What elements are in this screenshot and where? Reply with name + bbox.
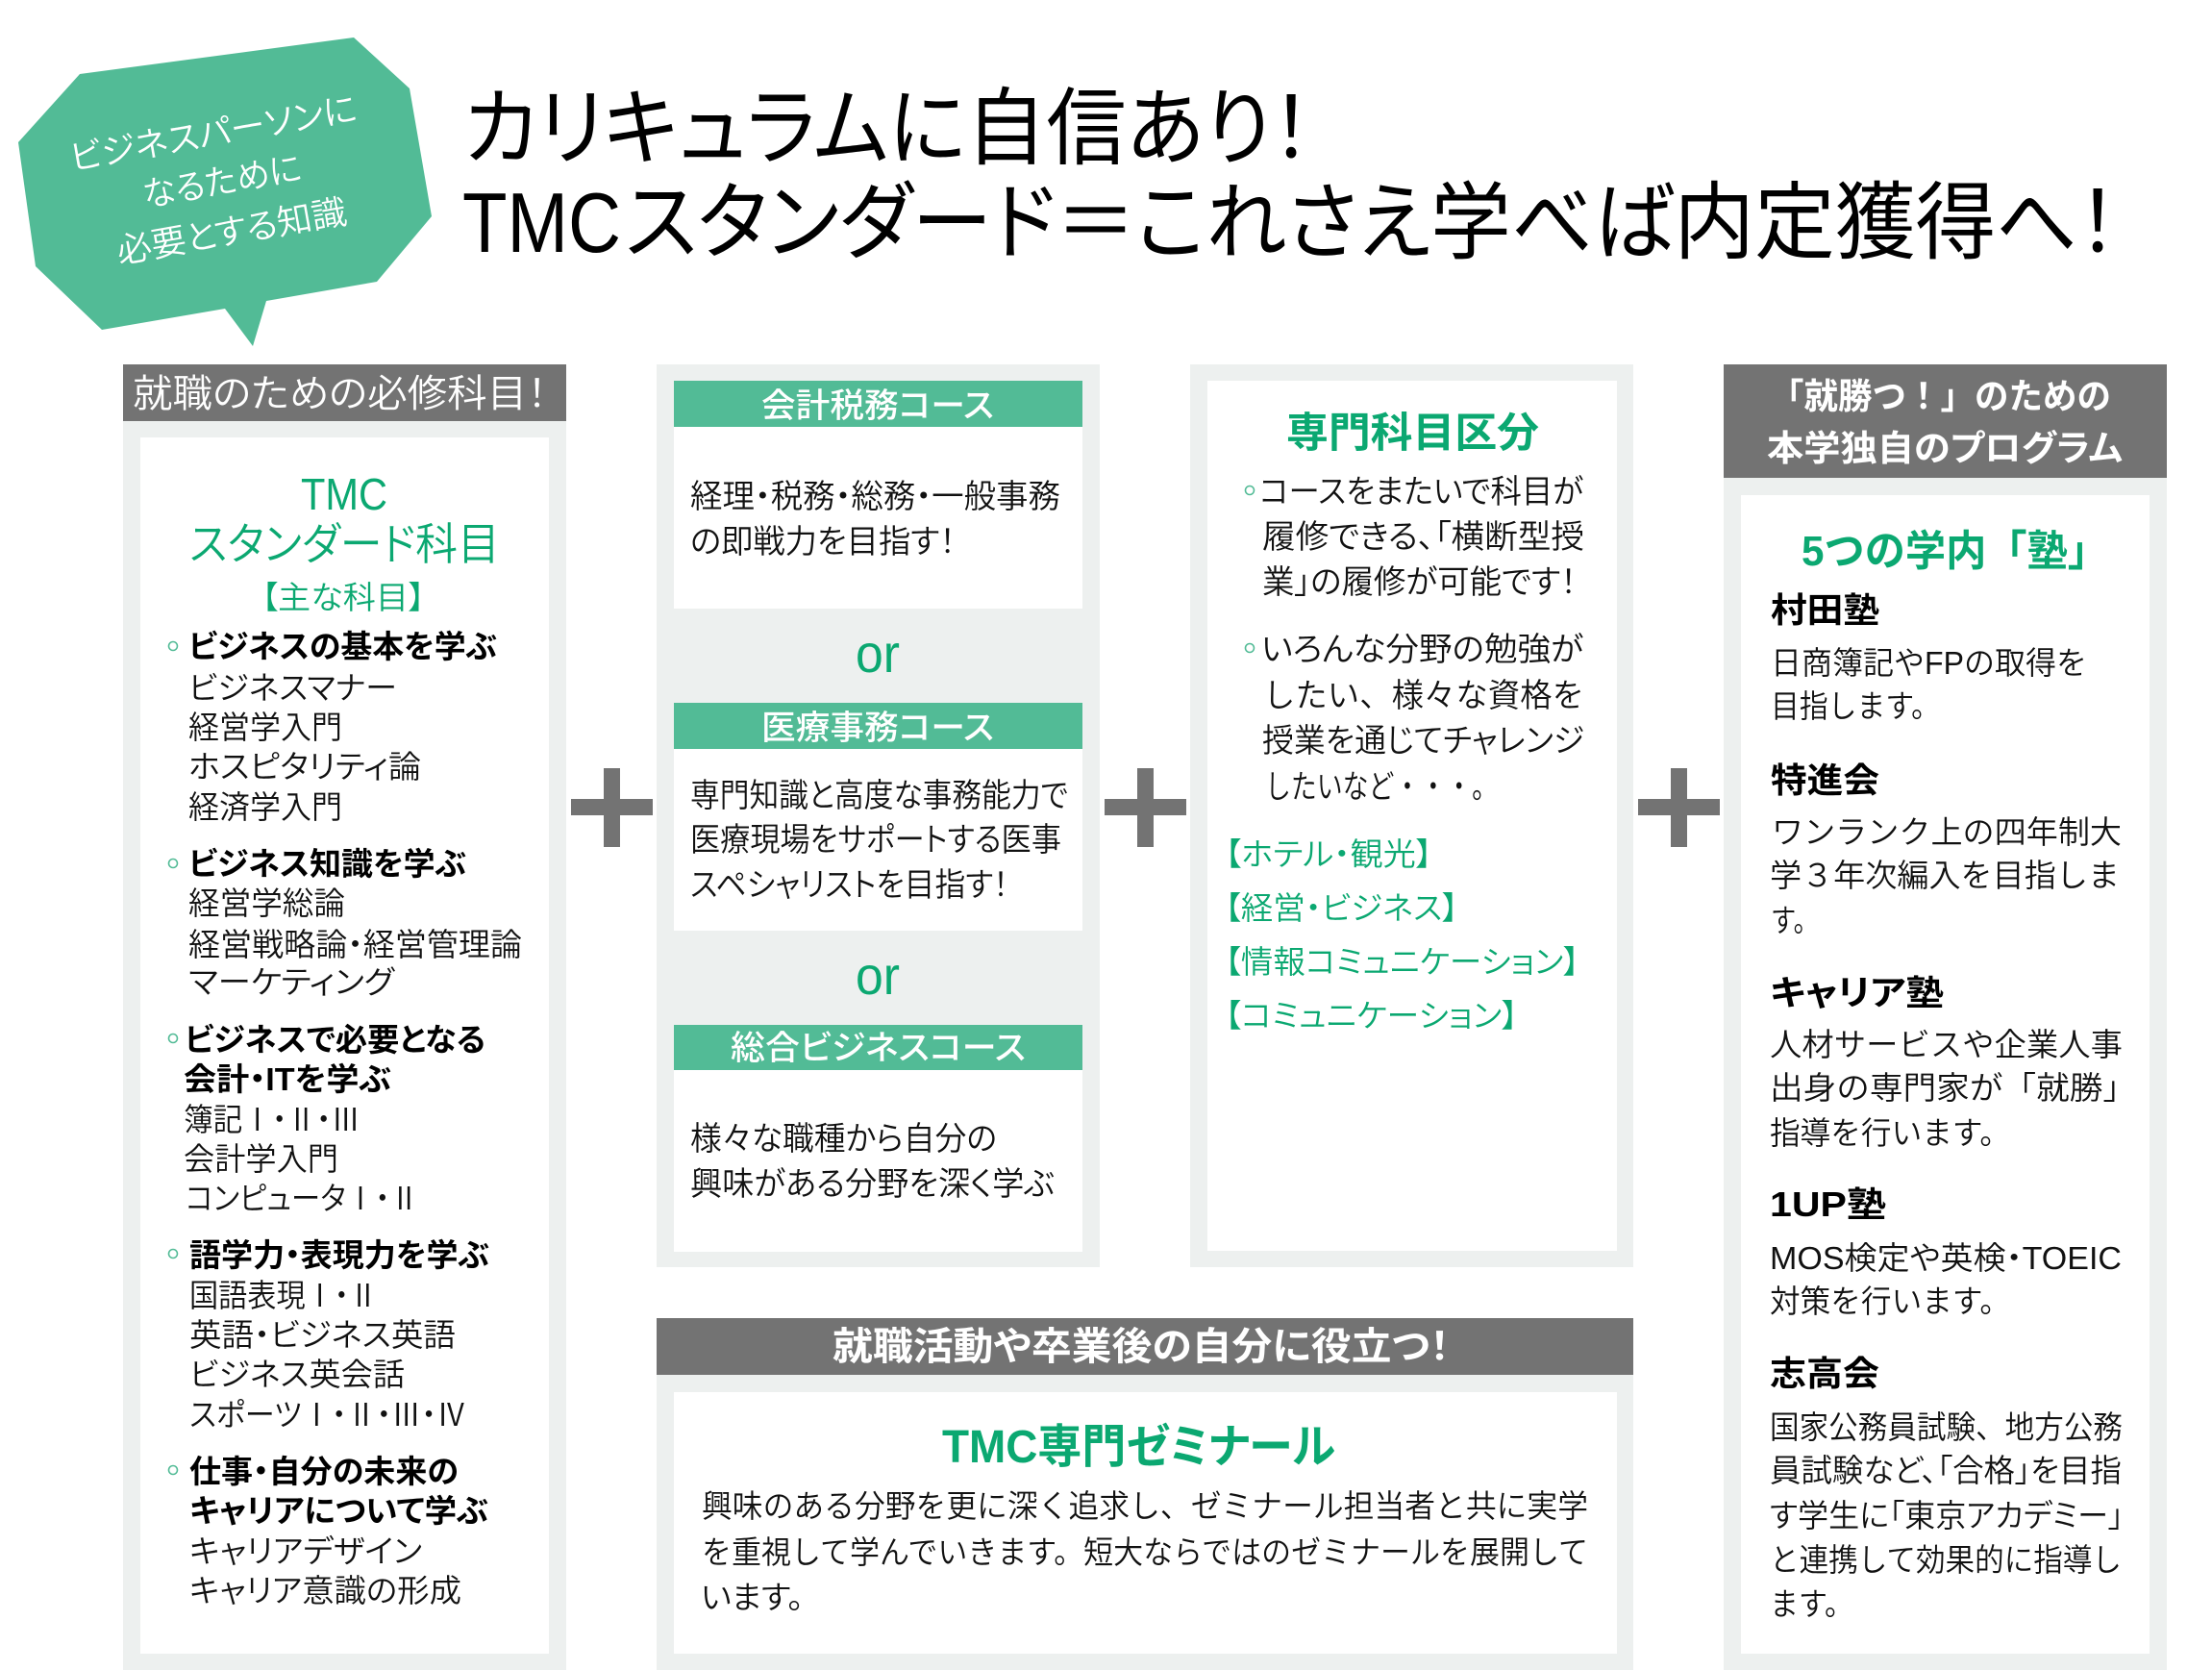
panel: required subjects: コンピュータⅠ・Ⅱ bbox=[186, 1181, 419, 1216]
panel: seminar: 興味のある分野を更に深く追求し、ゼミナール担当者と共に実学 bbox=[702, 1488, 1588, 1524]
course: medical office: 医療事務コース bbox=[761, 710, 994, 747]
panel: original program: キャリア塾 bbox=[1770, 973, 1944, 1012]
panel: specialist subject categories: いろんな分野の勉強が bbox=[1261, 632, 1584, 668]
panel: required subjects: キャリアデザイン bbox=[189, 1533, 422, 1569]
panel: required subjects: 就職のための必修科目！ bbox=[133, 373, 547, 415]
panel: specialist subject categories: したいなど・・・。 bbox=[1265, 769, 1498, 806]
panel: original program: 「就勝つ！」のための bbox=[1770, 377, 2111, 416]
panel: specialist subject categories: 【情報コミュニケーション】 bbox=[1225, 944, 1579, 980]
or label 1: or bbox=[856, 623, 900, 684]
course: general business: 興味がある分野を深く学ぶ bbox=[690, 1166, 1055, 1203]
panel: required subjects: TMC bbox=[301, 469, 387, 519]
panel: original program: 1UP塾 bbox=[1770, 1184, 1886, 1224]
panel: original program: 指導を行います。 bbox=[1770, 1115, 2010, 1151]
panel: specialist subject categories: 【経営・ビジネス】 bbox=[1225, 890, 1458, 926]
panel: original program: 日商簿記やFPの取得を bbox=[1771, 645, 2087, 681]
panel: original program: 人材サービスや企業人事 bbox=[1770, 1027, 2123, 1062]
or label 2: or bbox=[856, 945, 900, 1006]
panel: required subjects bbox=[123, 364, 566, 1670]
panel: required subjects: 語学力・表現力を学ぶ bbox=[189, 1237, 489, 1273]
course: general business bbox=[674, 1025, 1082, 1252]
panel: required subjects: 国語表現Ⅰ・Ⅱ bbox=[189, 1278, 378, 1313]
course: medical office: 医療現場をサポートする医事 bbox=[690, 822, 1061, 859]
title: カリキュラムに自信あり！ bbox=[463, 81, 1311, 176]
panel: original program: 本学独自のプログラム bbox=[1767, 429, 2123, 468]
panel: required subjects: 経営学総論 bbox=[188, 885, 345, 921]
panel: required subjects: 仕事・自分の未来の bbox=[189, 1454, 459, 1489]
panel: specialist subject categories: コースをまたいで科目が bbox=[1259, 474, 1584, 511]
panel: required subjects: 経営学入門 bbox=[188, 710, 342, 745]
panel: seminar: を重視して学んでいきます。短大ならではのゼミナールを展開して bbox=[702, 1534, 1588, 1570]
panel: required subjects: 会計学入門 bbox=[184, 1141, 338, 1177]
panel: required subjects: 英語・ビジネス英語 bbox=[189, 1317, 456, 1353]
panel: original program: 国家公務員試験、地方公務 bbox=[1770, 1409, 2123, 1445]
panel: original program: 目指します。 bbox=[1771, 688, 1940, 724]
panel: seminar: います。 bbox=[701, 1580, 804, 1615]
panel: original program: 特進会 bbox=[1771, 760, 1879, 800]
panel: required subjects: スポーツⅠ・Ⅱ・Ⅲ・Ⅳ bbox=[189, 1397, 466, 1433]
panel: required subjects: ビジネス知識を学ぶ bbox=[188, 846, 466, 882]
panel: specialist subject categories: 【コミュニケーション】 bbox=[1225, 998, 1518, 1034]
panel: original program: 学３年次編入を目指しま bbox=[1770, 858, 2120, 893]
panel: original program: 村田塾 bbox=[1771, 590, 1879, 630]
panel: original program: 対策を行います。 bbox=[1770, 1284, 2010, 1319]
plus icon 2 bbox=[1105, 768, 1186, 847]
panel: original program: す。 bbox=[1771, 903, 1819, 938]
panel: original program: ます。 bbox=[1770, 1586, 1853, 1622]
panel: courses bbox=[657, 364, 1100, 1267]
speech bubble callout: 必要とする知識 bbox=[113, 191, 350, 271]
panel: required subjects: 会計・ITを学ぶ bbox=[184, 1061, 391, 1097]
course: medical office: スペシャリストを目指す！ bbox=[690, 867, 1008, 904]
panel: specialist subject categories: 業」の履修が可能です！ bbox=[1262, 564, 1577, 601]
title: スタンダード＝これさえ学べば内定獲得へ！ bbox=[625, 175, 2118, 270]
panel: seminar bbox=[657, 1318, 1633, 1670]
speech bubble callout: なるために bbox=[139, 148, 305, 214]
panel: specialist subject categories: 【ホテル・観光】 bbox=[1225, 836, 1432, 872]
title bbox=[462, 81, 2118, 270]
course: accounting and tax: 会計税務コース bbox=[761, 387, 994, 425]
panel: original program: MOS検定や英検・TOEIC bbox=[1770, 1240, 2122, 1276]
plus icon 3 bbox=[1638, 768, 1720, 847]
course: general business: 様々な職種から自分の bbox=[690, 1121, 997, 1158]
panel: specialist subject categories bbox=[1190, 364, 1633, 1267]
course: medical office bbox=[674, 703, 1082, 931]
panel: original program: 出身の専門家が「就勝」 bbox=[1770, 1070, 2136, 1106]
panel: specialist subject categories: 履修できる、「横断型授 bbox=[1262, 519, 1584, 556]
panel: original program: 5つの学内「塾」 bbox=[1802, 528, 2108, 575]
panel: seminar: 就職活動や卒業後の自分に役立つ！ bbox=[833, 1326, 1450, 1368]
course: accounting and tax: 経理・税務・総務・一般事務 bbox=[690, 479, 1060, 515]
panel: specialist subject categories: 専門科目区分 bbox=[1286, 411, 1539, 457]
panel: required subjects: ビジネスの基本を学ぶ bbox=[188, 629, 497, 664]
panel: required subjects: キャリア意識の形成 bbox=[189, 1573, 461, 1608]
panel: required subjects: マーケティング bbox=[188, 964, 396, 1000]
panel: original program: と連携して効果的に指導し bbox=[1770, 1542, 2122, 1578]
panel: required subjects: 【主な科目】 bbox=[261, 580, 425, 615]
panel: required subjects: スタンダード科目 bbox=[189, 519, 500, 569]
panel: original program: ワンランク上の四年制大 bbox=[1772, 814, 2122, 850]
panel: specialist subject categories: したい、様々な資格を bbox=[1263, 678, 1584, 714]
panel: original program: す学生に「東京アカデミー」 bbox=[1770, 1498, 2124, 1533]
course: general business: 総合ビジネスコース bbox=[731, 1030, 1026, 1067]
panel: required subjects: ビジネスで必要となる bbox=[185, 1022, 485, 1058]
panel: required subjects: 経営戦略論・経営管理論 bbox=[188, 927, 522, 962]
panel: required subjects: 経済学入門 bbox=[188, 789, 342, 825]
course: accounting and tax bbox=[674, 381, 1082, 609]
panel: seminar: TMC専門ゼミナール bbox=[942, 1422, 1335, 1473]
panel: original program: 志高会 bbox=[1770, 1354, 1879, 1393]
speech bubble callout: ビジネスパーソンに bbox=[67, 88, 360, 178]
panel: required subjects: 簿記Ⅰ・Ⅱ・Ⅲ bbox=[184, 1102, 360, 1137]
panel: specialist subject categories: 授業を通じてチャレンジ bbox=[1262, 723, 1584, 760]
panel: original program: 員試験など、「合格」を目指 bbox=[1770, 1453, 2122, 1488]
plus icon 1 bbox=[571, 768, 653, 847]
panel: required subjects: キャリアについて学ぶ bbox=[189, 1493, 488, 1529]
panel: original program bbox=[1724, 364, 2167, 1670]
panel: required subjects: ホスピタリティ論 bbox=[188, 749, 421, 785]
title: TMC bbox=[462, 175, 621, 270]
panel: required subjects: ビジネス英会話 bbox=[189, 1357, 405, 1392]
course: accounting and tax: の即戦力を目指す！ bbox=[690, 524, 956, 561]
panel: required subjects: ビジネスマナー bbox=[188, 670, 397, 706]
speech bubble callout bbox=[18, 37, 432, 346]
course: medical office: 専門知識と高度な事務能力で bbox=[690, 778, 1068, 814]
